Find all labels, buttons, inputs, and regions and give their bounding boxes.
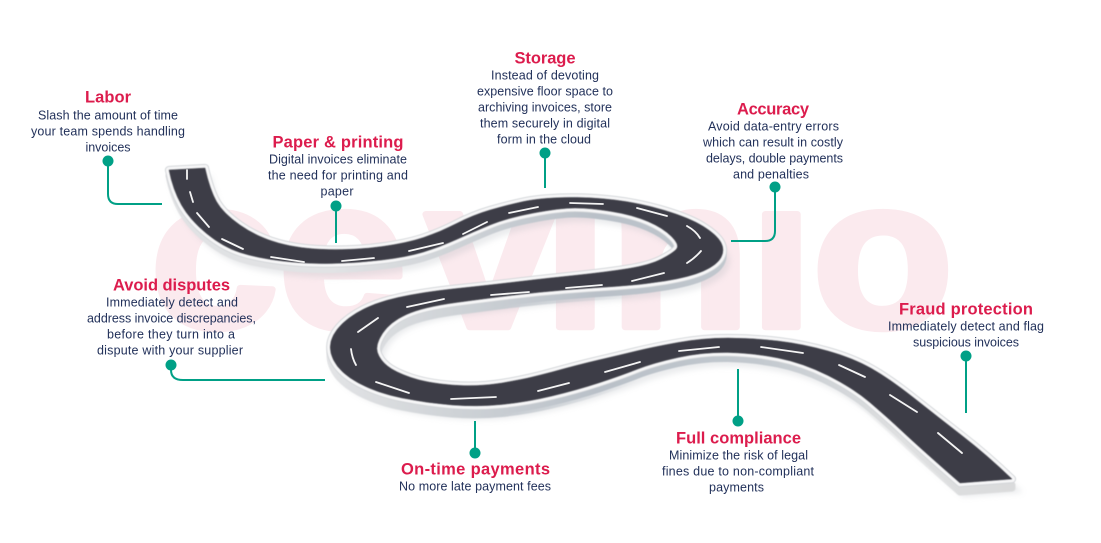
callout: Labor: Labor	[85, 88, 132, 106]
callout: Labor: your team spends handling	[31, 124, 185, 138]
callout: Storage: expensive floor space to	[477, 84, 613, 98]
callout: Labor: Slash the amount of time	[38, 108, 178, 122]
callout: Accuracy: delays, double payments	[706, 152, 843, 166]
callout: Paper & printing: Paper & printing	[272, 134, 404, 152]
callout: Accuracy	[702, 100, 844, 241]
callout: Avoid disputes	[87, 276, 325, 380]
watermark: brand wordmark: cevınıo	[150, 135, 954, 373]
callout: Accuracy: Avoid data-entry errors	[708, 120, 839, 134]
road centre dashes	[187, 170, 962, 453]
callout: Fraud protection: Immediately detect and flag	[888, 320, 1044, 334]
callout: Avoid disputes: Immediately detect and	[106, 296, 238, 310]
callout: On-time payments: No more late payment fees	[399, 480, 551, 494]
callout: Fraud protection	[888, 300, 1044, 413]
callout: Full compliance: Full compliance	[676, 430, 801, 448]
winding road	[169, 168, 1016, 494]
callout: Storage: them securely in digital	[480, 116, 610, 130]
callout: Fraud protection: suspicious invoices	[913, 336, 1019, 350]
callout: On-time payments: On-time payments	[401, 460, 550, 478]
callout: Paper & printing	[268, 134, 408, 243]
callout: Avoid disputes: dispute with your supplier	[97, 344, 243, 358]
callout: Paper & printing: Digital invoices eliminate	[269, 152, 407, 166]
callout: Accuracy: and penalties	[733, 168, 809, 182]
callout: Storage: Instead of devoting	[491, 68, 599, 82]
callout: Storage	[477, 50, 613, 188]
callout: Accuracy: which can result in costly	[702, 136, 844, 150]
callout: On-time payments	[399, 421, 551, 494]
callout: Fraud protection: Fraud protection	[899, 300, 1033, 318]
callout: Storage: form in the cloud	[497, 132, 591, 146]
callout: Accuracy: Accuracy	[737, 100, 810, 118]
callout: Storage: Storage	[514, 50, 576, 68]
callout: Storage: archiving invoices, store	[478, 100, 612, 114]
callout: Labor: invoices	[86, 140, 130, 154]
callout: Full compliance: payments	[709, 480, 764, 494]
callout: Paper & printing: the need for printing and	[268, 168, 408, 182]
callout: Avoid disputes: address invoice discrepancies,	[87, 312, 256, 326]
callout: Avoid disputes: before they turn into a	[107, 328, 235, 342]
callout: Full compliance: fines due to non-compliant	[662, 464, 815, 478]
callout: Full compliance	[662, 369, 815, 494]
callout: Paper & printing: paper	[320, 184, 354, 198]
callout: Labor	[31, 88, 185, 204]
callout: Avoid disputes: Avoid disputes	[113, 276, 230, 294]
callout: Full compliance: Minimize the risk of legal	[669, 448, 808, 462]
